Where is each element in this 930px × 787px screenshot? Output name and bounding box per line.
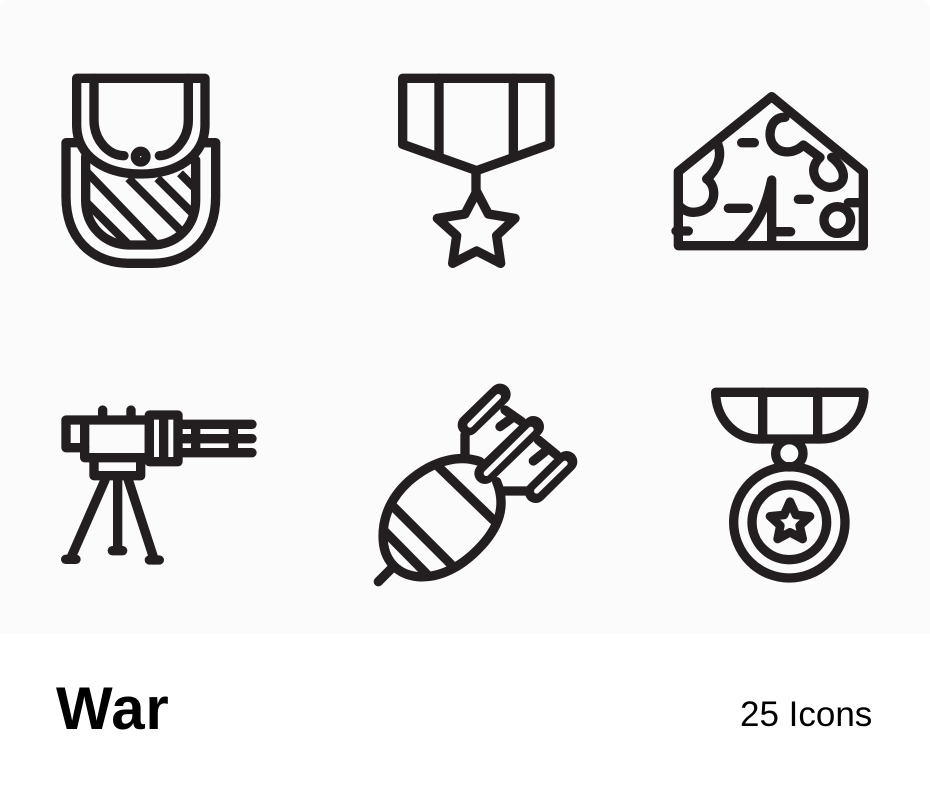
icon: round medal with star [716, 392, 864, 578]
icon grid [61, 74, 869, 586]
icon: ammunition pouch [66, 78, 216, 263]
icon: gatling gun on tripod [66, 410, 252, 560]
title: War [56, 675, 170, 742]
icon: aerial bomb [378, 394, 567, 582]
icon: ribbon medal with star [403, 78, 550, 263]
icon count: 25 Icons [740, 695, 872, 734]
icon: camouflage tent [676, 97, 863, 246]
